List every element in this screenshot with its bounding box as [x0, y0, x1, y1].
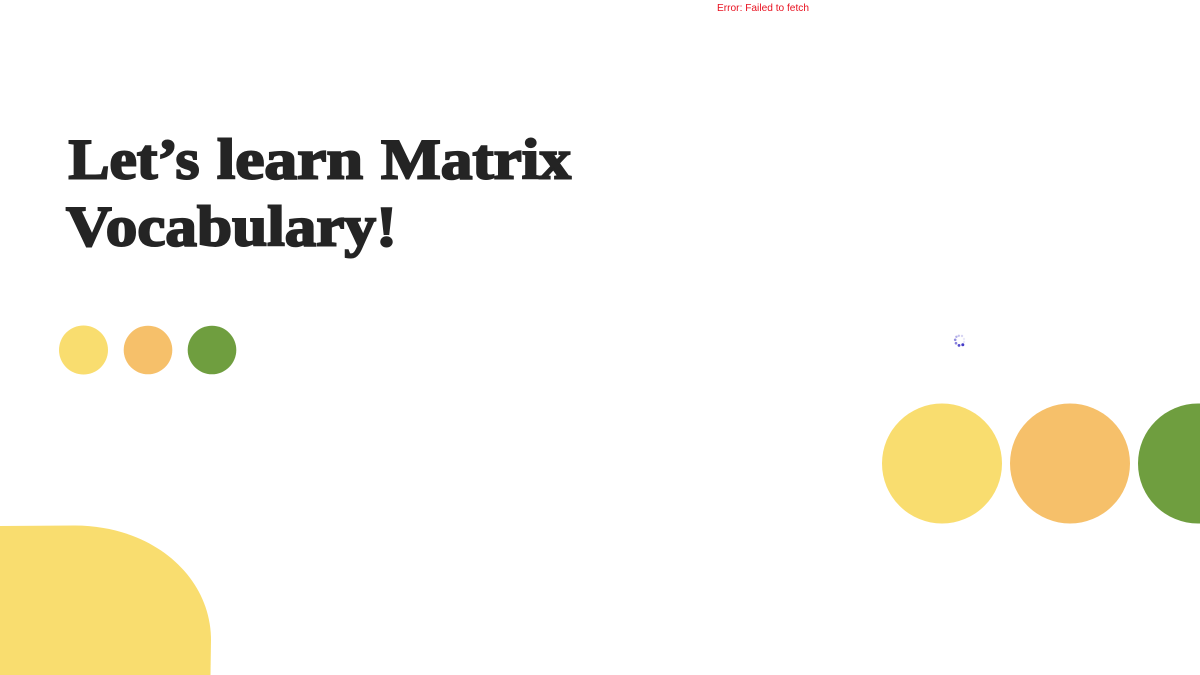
small yellow circle: [59, 326, 108, 374]
loading spinner: [954, 335, 965, 347]
large circles row: [882, 404, 1200, 524]
title line 2: Vocabulary!: [66, 196, 397, 258]
yellow corner blob: [0, 526, 211, 675]
small orange circle: [124, 326, 172, 374]
small green circle: [188, 326, 236, 374]
large yellow circle: [882, 404, 1002, 524]
title line 1: learn: [217, 128, 363, 192]
title line 1: [68, 128, 572, 192]
large orange circle: [1010, 404, 1130, 524]
title: [66, 128, 572, 258]
large green circle: [1138, 404, 1200, 524]
title line 1: Let’s: [68, 128, 200, 192]
small circles row: [59, 326, 236, 374]
title line 1: Matrix: [381, 128, 572, 192]
error message: Error: Failed to fetch: [717, 2, 809, 14]
